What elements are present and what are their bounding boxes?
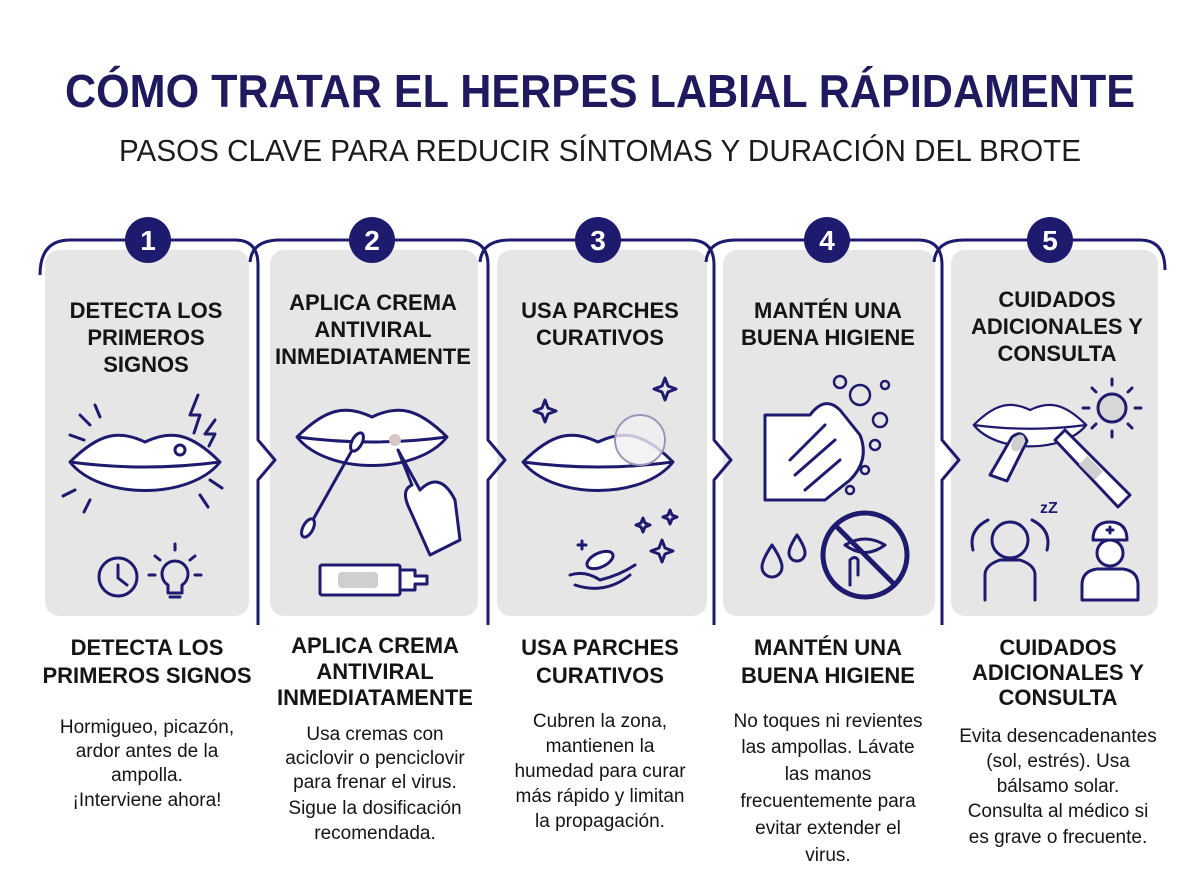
icon: resting person <box>972 500 1058 600</box>
step numbers <box>125 217 1073 263</box>
panel 2: INMEDIATAMENTE <box>277 685 473 710</box>
icon: no touching <box>823 513 907 597</box>
panel 1: SIGNOS <box>103 352 189 377</box>
icon: doctor <box>1082 522 1138 600</box>
panel 4: MANTÉN UNA <box>754 298 902 323</box>
panel 4: evitar extender el <box>755 818 901 839</box>
panel 5: ADICIONALES Y <box>971 314 1143 339</box>
panel 2: para frenar el virus. <box>293 772 457 793</box>
step numbers: 4 <box>819 225 835 256</box>
connector line <box>40 240 1165 625</box>
panel 3: CURATIVOS <box>536 325 664 350</box>
icon: lips with patch <box>523 378 677 562</box>
panel 5: Consulta al médico si <box>968 801 1148 822</box>
icon: resting person: zZ <box>1040 500 1058 517</box>
icon: lips with tingling <box>63 395 222 512</box>
panel 1: ampolla. <box>111 765 183 786</box>
panel 5: (sol, estrés). Usa <box>986 751 1130 772</box>
panel 5: ADICIONALES Y <box>972 660 1144 685</box>
panel 5: bálsamo solar. <box>997 776 1119 797</box>
panel 3: mantienen la <box>546 736 655 757</box>
step numbers: 1 <box>140 225 156 256</box>
panel 3 <box>514 298 686 832</box>
step numbers: 5 <box>1042 225 1058 256</box>
panel 2: Usa cremas con <box>306 724 444 745</box>
panel 5: CUIDADOS <box>998 287 1116 312</box>
panel 4: las manos <box>785 764 871 785</box>
subtitle: PASOS CLAVE PARA REDUCIR SÍNTOMAS Y DURACIÓN DEL BROTE <box>119 133 1081 168</box>
panel 2: recomendada. <box>314 823 436 844</box>
panel 1: ¡Interviene ahora! <box>73 790 221 811</box>
step numbers: 2 <box>364 225 380 256</box>
panel 1: PRIMEROS <box>87 325 205 350</box>
panel 4: MANTÉN UNA <box>754 635 902 660</box>
panel 5: CONSULTA <box>998 341 1117 366</box>
panel 5 <box>959 287 1157 848</box>
panel 4: virus. <box>805 845 851 866</box>
panel 2: ANTIVIRAL <box>316 659 434 684</box>
panel 3: USA PARCHES <box>521 635 679 660</box>
panel 4: No toques ni revientes <box>733 711 923 732</box>
panel 2: INMEDIATAMENTE <box>275 344 471 369</box>
icon: drops <box>762 535 805 577</box>
icon: bulb <box>149 544 201 597</box>
icon: clock <box>99 558 137 596</box>
panel 5: es grave o frecuente. <box>969 827 1147 848</box>
panel 4: frecuentemente para <box>740 791 916 812</box>
panel 2: Sigue la dosificación <box>288 798 462 819</box>
icon: hand with patch <box>570 541 635 588</box>
panel 4 <box>733 298 923 866</box>
panel 1: Hormigueo, picazón, <box>60 717 234 738</box>
icon: lips with swabs <box>297 410 460 555</box>
panel 1 <box>42 298 252 811</box>
panel 4: BUENA HIGIENE <box>741 663 915 688</box>
icon: lips finger tube sun <box>974 379 1141 507</box>
panel backgrounds <box>45 250 1158 616</box>
panel 2: aciclovir o penciclovir <box>285 748 465 769</box>
panel 3: Cubren la zona, <box>533 711 667 732</box>
panel 5: CONSULTA <box>999 685 1118 710</box>
panel 2: ANTIVIRAL <box>314 317 432 342</box>
panel 2: APLICA CREMA <box>289 290 457 315</box>
panel 1: ardor antes de la <box>76 741 219 762</box>
panel 2 <box>275 290 473 844</box>
panel 3: más rápido y limitan <box>516 786 684 807</box>
step numbers: 3 <box>590 225 606 256</box>
panel 3: humedad para curar <box>514 761 686 782</box>
panel 2: APLICA CREMA <box>291 633 459 658</box>
icon: tube <box>320 565 427 595</box>
panel 3: USA PARCHES <box>521 298 679 323</box>
panel 3: la propagación. <box>535 811 665 832</box>
title: CÓMO TRATAR EL HERPES LABIAL RÁPIDAMENTE <box>65 65 1135 117</box>
panel 1: DETECTA LOS <box>70 298 222 323</box>
panel 4: BUENA HIGIENE <box>741 325 915 350</box>
panel 1: DETECTA LOS <box>71 635 223 660</box>
panel 5: CUIDADOS <box>999 635 1117 660</box>
panel 4: las ampollas. Lávate <box>741 737 915 758</box>
icon: washing hands <box>765 376 889 500</box>
panel 1: PRIMEROS SIGNOS <box>42 663 252 688</box>
panel 3: CURATIVOS <box>536 663 664 688</box>
panel 5: Evita desencadenantes <box>959 726 1157 747</box>
